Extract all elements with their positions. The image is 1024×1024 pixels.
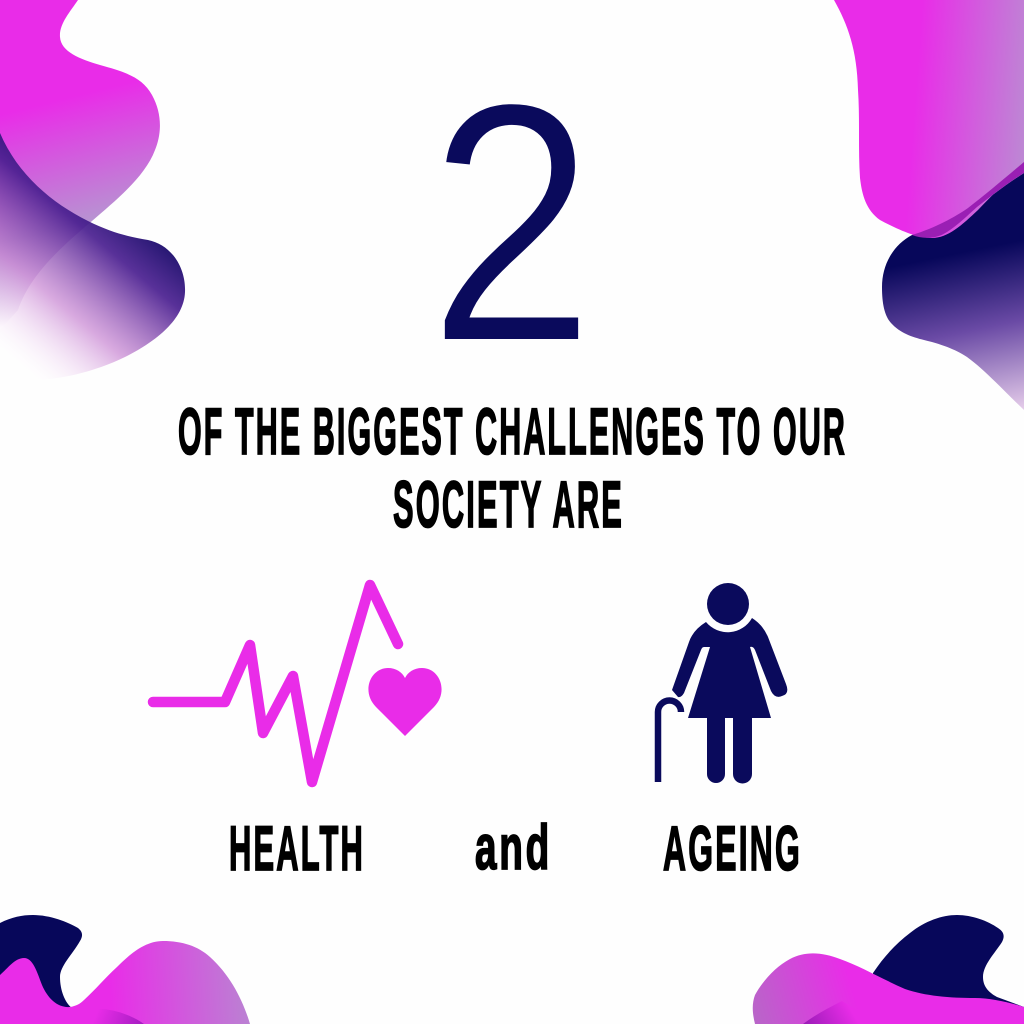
heading <box>178 394 847 541</box>
label: and: and <box>475 813 552 883</box>
blob: bottom-left dark wedge <box>80 1009 144 1024</box>
blob: bottom-right magenta <box>753 953 1024 1024</box>
blob: top-left navy fade <box>0 133 185 380</box>
icon: head <box>707 583 749 625</box>
blob: bottom-right corner <box>753 915 1024 1024</box>
icon: cane <box>658 700 681 782</box>
icon: heart <box>368 668 442 736</box>
icon: heartbeat line and heart <box>153 585 442 782</box>
blob: top-right overlap strip <box>912 162 1024 238</box>
icon: right leg <box>733 716 752 784</box>
icon: left leg <box>707 716 725 783</box>
blob: bottom-left corner <box>0 915 250 1024</box>
blob: top-right corner <box>834 0 1024 410</box>
blob: bottom-right navy <box>873 915 1024 1024</box>
blob: top-left corner <box>0 0 185 380</box>
label: ageing: AGEING <box>663 814 802 884</box>
text: HEALTH <box>229 814 365 884</box>
big number 2: 2 <box>428 32 595 414</box>
blob: top-left magenta <box>0 0 160 330</box>
blob: top-right navy fade <box>882 173 1024 410</box>
blob: bottom-left navy <box>0 915 90 1024</box>
icon: ECG line <box>153 585 398 782</box>
icon: elderly woman with cane <box>658 583 787 784</box>
blob: bottom-left magenta <box>0 941 250 1024</box>
blob: top-right magenta <box>834 0 1024 238</box>
blob: bottom-right dark wedge <box>803 1001 880 1024</box>
icon: dress and arms <box>672 618 787 718</box>
heading: SOCIETY ARE <box>393 467 624 541</box>
